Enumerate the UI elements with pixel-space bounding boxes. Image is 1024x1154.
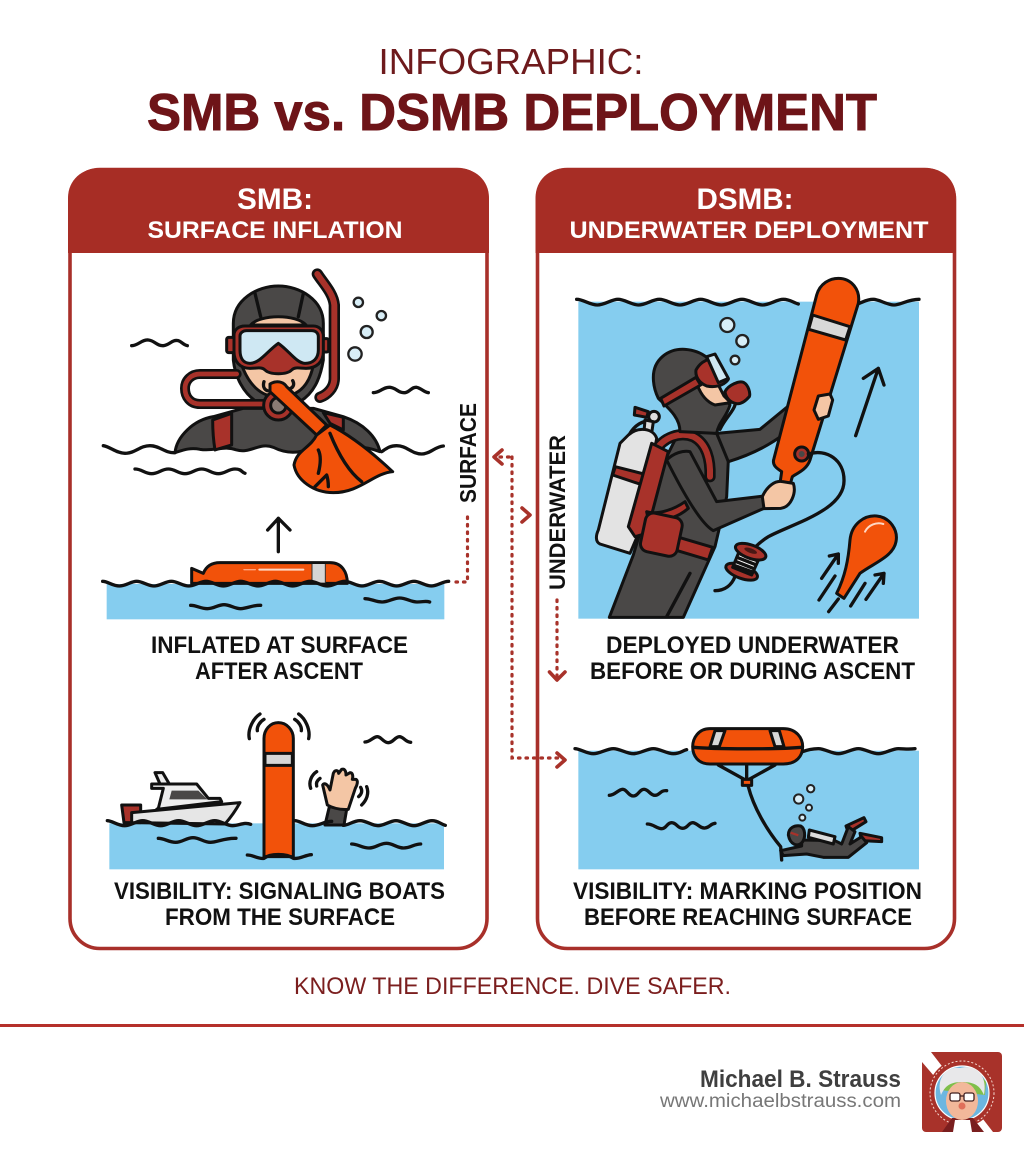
waves bbox=[107, 821, 445, 826]
SMB bag bbox=[294, 425, 393, 493]
surfaced DSMB bbox=[693, 729, 803, 764]
panel header bbox=[536, 168, 956, 253]
bubbles bbox=[720, 318, 748, 364]
snorkel bbox=[317, 274, 334, 397]
title bbox=[147, 41, 877, 142]
line and reel bbox=[715, 453, 844, 591]
lower arm bbox=[667, 451, 764, 531]
panel header: UNDERWATER DEPLOYMENT bbox=[570, 217, 929, 244]
breathing hose bbox=[185, 374, 263, 404]
panel header bbox=[68, 168, 489, 253]
illustration: diver inflating SMB at surface bbox=[103, 274, 449, 619]
bubbles bbox=[348, 298, 386, 361]
ascent arrow bbox=[856, 368, 884, 436]
title: SMB vs. DSMB DEPLOYMENT bbox=[147, 84, 877, 142]
forehead and face bbox=[251, 317, 306, 325]
surface marker buoy bbox=[264, 723, 293, 857]
raised arm bbox=[717, 406, 788, 462]
caption: deployed underwater: DEPLOYED UNDERWATER bbox=[606, 632, 899, 659]
logo bbox=[922, 1052, 1002, 1132]
panel frame bbox=[70, 170, 487, 948]
inflation tube bbox=[270, 382, 327, 435]
water bbox=[578, 751, 919, 869]
author credit: Michael B. Strauss bbox=[700, 1066, 901, 1093]
tether line bbox=[748, 787, 782, 860]
panel header: SMB: bbox=[237, 183, 313, 216]
label: surface bbox=[455, 403, 481, 582]
caption: inflated at surface: INFLATED AT SURFACE bbox=[151, 632, 408, 659]
waves bbox=[609, 789, 667, 796]
buoy lines bbox=[718, 765, 775, 781]
caption: inflated at surface bbox=[151, 632, 408, 685]
footer rule bbox=[0, 1024, 1024, 1027]
air tank bbox=[596, 407, 659, 553]
water bbox=[109, 823, 444, 869]
wetsuit shoulders bbox=[175, 408, 380, 453]
label: surface: SURFACE bbox=[455, 403, 481, 503]
connector arrows between panels bbox=[494, 450, 565, 767]
label: underwater bbox=[545, 435, 570, 680]
small diver bbox=[781, 818, 882, 857]
caption: signaling boats: FROM THE SURFACE bbox=[165, 904, 395, 931]
caption: marking position bbox=[573, 878, 922, 931]
caption: marking position: BEFORE REACHING SURFACE bbox=[584, 904, 912, 931]
author credit bbox=[659, 1066, 901, 1112]
regulator bbox=[264, 391, 293, 420]
floating SMB bbox=[192, 563, 347, 583]
caption: deployed underwater: BEFORE OR DURING ASCENT bbox=[590, 658, 915, 685]
bubbles bbox=[794, 785, 814, 821]
mask bbox=[227, 337, 237, 353]
up arrow bbox=[268, 518, 290, 552]
title: INFOGRAPHIC: bbox=[378, 41, 644, 82]
harness bbox=[655, 435, 710, 477]
motion arrows bbox=[819, 554, 884, 612]
caption: inflated at surface: AFTER ASCENT bbox=[195, 658, 363, 685]
caption: signaling boats: VISIBILITY: SIGNALING BOATS bbox=[114, 878, 445, 905]
panel header: DSMB: bbox=[696, 183, 794, 216]
panel: SMB surface inflation bbox=[68, 168, 489, 948]
small inflating buoy bbox=[837, 516, 896, 598]
caption: marking position: VISIBILITY: MARKING POSITION bbox=[573, 878, 922, 905]
panel frame bbox=[538, 170, 954, 948]
illustration: DSMB on surface with diver below bbox=[575, 729, 919, 869]
panel header: SURFACE INFLATION bbox=[148, 217, 402, 244]
water bbox=[578, 302, 919, 619]
boat bbox=[122, 773, 240, 824]
waving hand bbox=[310, 769, 368, 825]
caption: signaling boats bbox=[114, 878, 445, 931]
illustration: boat, marker and waving hand bbox=[107, 714, 445, 869]
tagline: KNOW THE DIFFERENCE. DIVE SAFER. bbox=[294, 973, 731, 1000]
inflating buoy bbox=[773, 278, 859, 485]
waist belt bbox=[675, 537, 713, 560]
water strip bbox=[107, 584, 444, 619]
head bbox=[653, 349, 750, 433]
diver body bbox=[609, 430, 728, 617]
panel: DSMB underwater deployment bbox=[536, 168, 956, 948]
pouch bbox=[639, 512, 684, 558]
upper hand bbox=[814, 394, 833, 419]
regulator bbox=[725, 382, 750, 404]
label: underwater: UNDERWATER bbox=[545, 435, 570, 590]
caption: deployed underwater bbox=[590, 632, 915, 685]
hood bbox=[233, 286, 323, 402]
mouth corners bbox=[263, 381, 294, 391]
illustration: diver deploying DSMB underwater bbox=[577, 278, 919, 619]
signal arcs bbox=[249, 714, 309, 739]
author credit: www.michaelbstrauss.com bbox=[659, 1091, 901, 1112]
lower hand bbox=[762, 481, 794, 509]
